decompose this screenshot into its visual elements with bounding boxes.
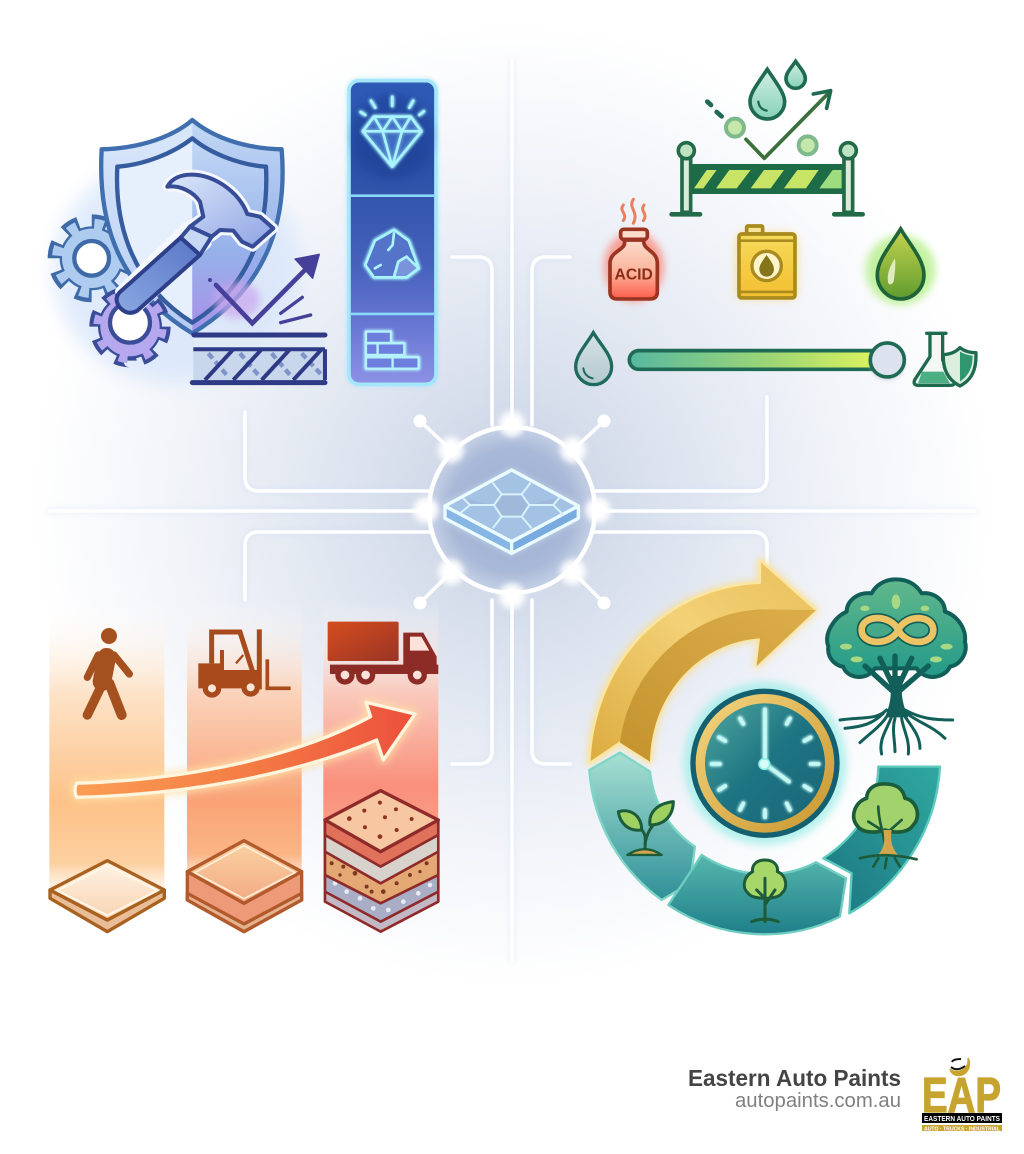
footer brand text: autopaints.com.au [735, 1090, 901, 1112]
column: light load [49, 600, 164, 910]
icon: green oil drop [866, 229, 936, 305]
icon: rising check arrow [208, 254, 319, 323]
arrow: increasing load [75, 702, 415, 797]
icon: forklift [198, 629, 291, 698]
chart: resistance slider [576, 333, 976, 386]
icon: water drops [750, 61, 805, 119]
icon: deflection check arrow [707, 91, 831, 158]
icon: clock [683, 682, 847, 845]
footer brand text [688, 1065, 901, 1112]
icon: striped barrier [672, 143, 863, 214]
young tree segment [668, 855, 846, 934]
panel: hardness column [347, 78, 438, 387]
footer brand text: Eastern Auto Paints [688, 1065, 901, 1091]
icon: hammer [117, 175, 273, 313]
icon: reinforced board [192, 335, 325, 383]
icon: bricks [366, 332, 419, 369]
connector network [50, 60, 975, 960]
icon: acid bottle [604, 199, 664, 302]
icon: oil can [735, 226, 798, 300]
sprout segment [589, 753, 695, 900]
logo: EAP: EASTERN AUTO PAINTS [924, 1114, 1000, 1123]
panel: long-term lifespan cycle [589, 560, 966, 934]
panel: load classes and slab thickness [49, 600, 438, 932]
icon: young tree [744, 860, 786, 922]
column: heavy load [323, 600, 438, 910]
icon: acid bottle: ACID [615, 266, 653, 283]
panel: durability shield, hammer and hardness scale [53, 78, 438, 387]
panel: chemical resistance [576, 61, 976, 386]
icon: multilayer slab [325, 791, 438, 932]
icon: medium slab [187, 841, 302, 932]
icon: thin slab [50, 861, 164, 932]
icon: truck [328, 622, 438, 685]
icon: rock [365, 230, 419, 277]
icon: hexagon paved slab [445, 470, 578, 553]
icon: infinity tree [827, 579, 966, 754]
icon: purple gear [96, 293, 164, 361]
icon: sprout [618, 802, 673, 855]
logo: EAP: AUTO · TRUCKS · INDUSTRIAL [924, 1126, 1000, 1132]
icon: flask and shield [914, 333, 976, 386]
icon: mature tree [854, 784, 917, 868]
icon: shield [101, 120, 283, 333]
icon: blue gear [54, 221, 129, 296]
central hub [413, 411, 611, 610]
logo: EAP: EAP [922, 1069, 1001, 1123]
arrow: gold circular arrow [589, 560, 816, 763]
logo: EAP [922, 1058, 1002, 1132]
icon: pedestrian [87, 628, 129, 715]
icon: diamond [361, 97, 424, 167]
column: medium load [187, 600, 302, 910]
mature tree segment [823, 767, 940, 913]
